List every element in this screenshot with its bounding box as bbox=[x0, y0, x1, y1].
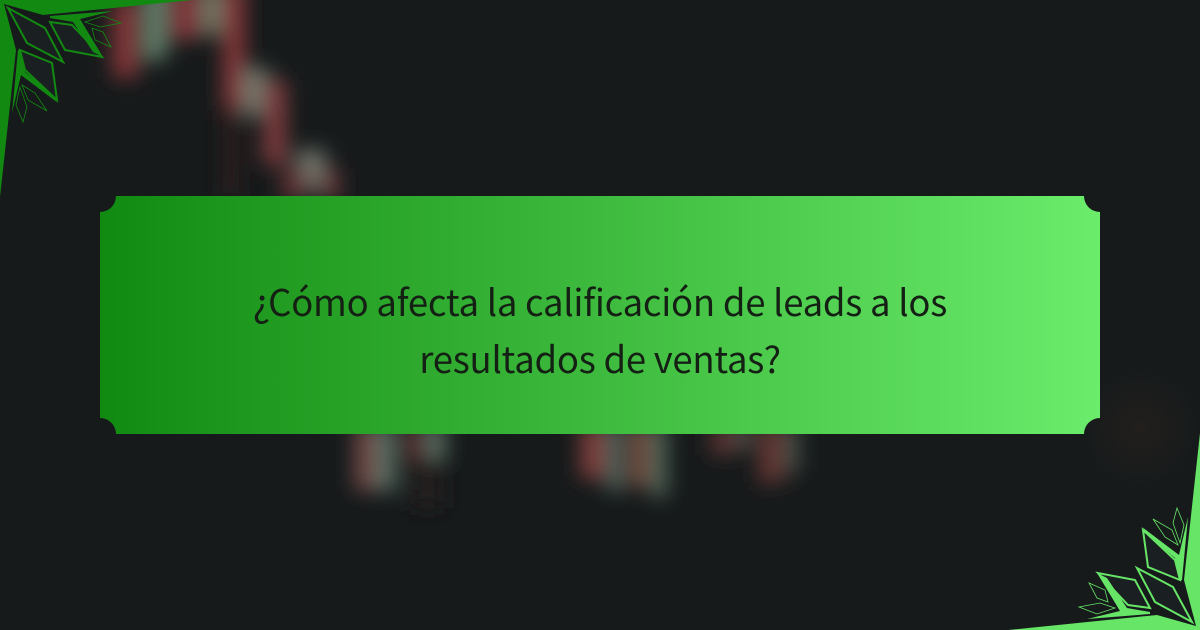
title bbox=[253, 274, 947, 384]
title: ¿Cómo afecta la calificación de leads a los bbox=[253, 274, 947, 327]
panel: title banner with notched corners bbox=[100, 196, 1100, 434]
icon: bottom-right leaf ornament bbox=[1008, 433, 1200, 630]
title: resultados de ventas? bbox=[419, 331, 781, 384]
icon: top-left leaf ornament bbox=[0, 0, 192, 197]
